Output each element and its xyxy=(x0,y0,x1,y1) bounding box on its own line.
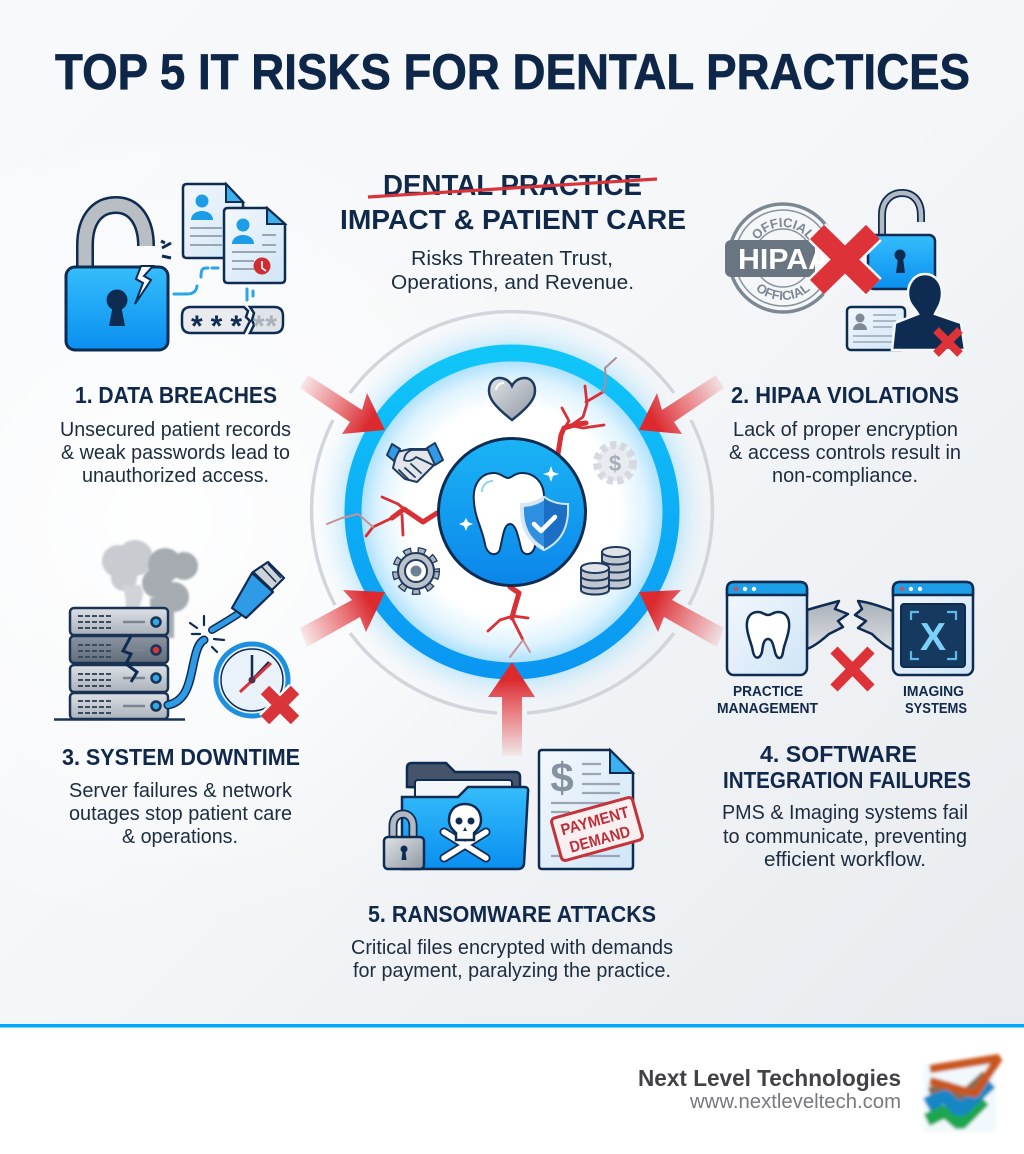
label: practice management xyxy=(717,684,818,717)
central heading: Risks Threaten Trust, xyxy=(411,248,613,270)
icon: open padlock xyxy=(868,193,935,289)
icon: large red x xyxy=(817,232,873,287)
heading xyxy=(723,741,971,793)
description: to communicate, preventing xyxy=(723,826,967,848)
base line xyxy=(54,718,185,721)
central heading xyxy=(340,170,686,294)
panel: ransomware attacks xyxy=(351,750,673,982)
icon: broken password bar xyxy=(182,307,283,343)
icon: tooth xyxy=(474,473,544,554)
crack: bottom xyxy=(488,587,530,657)
description xyxy=(351,937,673,982)
arrow 5: bottom xyxy=(488,662,535,756)
panel: data breaches xyxy=(60,184,291,487)
description: unauthorized access. xyxy=(82,465,269,487)
description: & access controls result in xyxy=(729,442,961,464)
central heading: IMPACT & PATIENT CARE xyxy=(340,204,686,235)
description: Critical files encrypted with demands xyxy=(351,937,673,959)
label: practice management: MANAGEMENT xyxy=(717,701,818,717)
central heading: Operations, and Revenue. xyxy=(391,272,634,294)
description xyxy=(69,780,293,848)
description: PMS & Imaging systems fail xyxy=(722,802,968,824)
dashed connectors xyxy=(174,268,253,300)
arrow 2: top right xyxy=(639,375,724,434)
icon: patient document front xyxy=(224,208,285,283)
crack: left xyxy=(327,497,437,536)
crossbones xyxy=(444,832,486,858)
icon: ransom document xyxy=(539,750,643,869)
padlock xyxy=(384,814,424,869)
icon: shield xyxy=(522,498,567,549)
heading: 5. RANSOMWARE ATTACKS xyxy=(368,901,656,927)
stamp: payment demand: PAYMENT xyxy=(559,804,631,839)
heading: 3. SYSTEM DOWNTIME xyxy=(62,744,300,770)
icon: folder with skull and padlock xyxy=(384,763,528,869)
icon: patient document back xyxy=(183,184,243,258)
description: outages stop patient care xyxy=(69,803,292,825)
skull xyxy=(449,804,481,840)
description: Lack of proper encryption xyxy=(733,419,958,441)
description: Server failures & network xyxy=(69,780,293,802)
blue ring xyxy=(353,353,671,671)
icon: person silhouette with x xyxy=(892,274,965,354)
icon: broken network cable xyxy=(168,614,238,705)
icon: smoke xyxy=(102,540,198,640)
label: imaging systems: SYSTEMS xyxy=(905,701,967,717)
description: Unsecured patient records xyxy=(60,419,291,441)
icon: faded dollar gear: $ xyxy=(609,451,621,476)
label: imaging systems xyxy=(903,684,967,717)
icon: broken connector xyxy=(807,601,893,650)
label: practice management: PRACTICE xyxy=(733,684,803,700)
heading: 4. SOFTWARE xyxy=(760,741,917,767)
description: & weak passwords lead to xyxy=(61,442,290,464)
icon: practice management window xyxy=(727,582,807,675)
icon: clock with x xyxy=(216,644,295,720)
description: non-compliance. xyxy=(772,465,918,487)
website: www.nextleveltech.com xyxy=(689,1091,901,1113)
outer grey ring xyxy=(312,312,712,713)
logo xyxy=(923,1058,999,1132)
icon: gear xyxy=(396,550,436,592)
icon: tooth xyxy=(747,612,789,658)
icon: hipaa stamp: OFFICIAL xyxy=(757,284,810,300)
icon: hipaa stamp: OFFICIAL xyxy=(752,218,812,240)
icon: broken password bar: ** xyxy=(253,310,277,343)
icon: handshake xyxy=(387,443,443,482)
description: & operations. xyxy=(122,826,238,848)
stamp: payment demand xyxy=(551,797,643,861)
crack: top right xyxy=(558,358,616,454)
central disc with tooth and shield xyxy=(438,438,586,586)
heading: INTEGRATION FAILURES xyxy=(723,767,971,793)
icon: network plug xyxy=(232,562,284,618)
heading: 2. HIPAA VIOLATIONS xyxy=(731,382,959,408)
icon: id card xyxy=(847,307,905,350)
icon: hipaa stamp: HIPAA xyxy=(738,244,830,276)
strike-through scribble xyxy=(368,179,657,197)
icon: imaging systems window: X xyxy=(920,616,946,659)
icon: faded dollar gear xyxy=(597,445,633,481)
sparkles xyxy=(459,466,559,531)
arrow 4: bottom right xyxy=(639,590,724,647)
description: for payment, paralyzing the practice. xyxy=(353,960,671,982)
icon: red x xyxy=(834,650,871,688)
icon: ransom document: $ xyxy=(550,754,574,801)
arrow 1: top left xyxy=(300,375,385,434)
icon: coins xyxy=(581,547,630,594)
heading: 1. DATA BREACHES xyxy=(75,382,277,408)
icon: broken open padlock xyxy=(66,205,171,350)
description xyxy=(722,802,968,871)
panel: hipaa violations xyxy=(725,189,964,487)
central diagram xyxy=(300,312,724,756)
central heading: DENTAL PRACTICE xyxy=(383,170,642,202)
panel: system downtime xyxy=(54,540,300,848)
panel: software integration failures xyxy=(717,582,973,871)
company name: Next Level Technologies xyxy=(638,1065,901,1091)
icon: imaging systems window xyxy=(893,582,973,675)
icon: broken password bar: *** xyxy=(191,310,242,343)
icon: heart xyxy=(489,378,535,420)
description xyxy=(60,419,291,487)
stamp: payment demand: DEMAND xyxy=(568,824,632,857)
arrow 3: bottom left xyxy=(300,590,385,647)
description xyxy=(729,419,961,487)
footer xyxy=(0,1024,1024,1154)
label: imaging systems: IMAGING xyxy=(903,684,964,700)
description: efficient workflow. xyxy=(764,849,926,871)
icon: hipaa stamp xyxy=(725,202,830,314)
icon: server stack xyxy=(70,608,168,719)
